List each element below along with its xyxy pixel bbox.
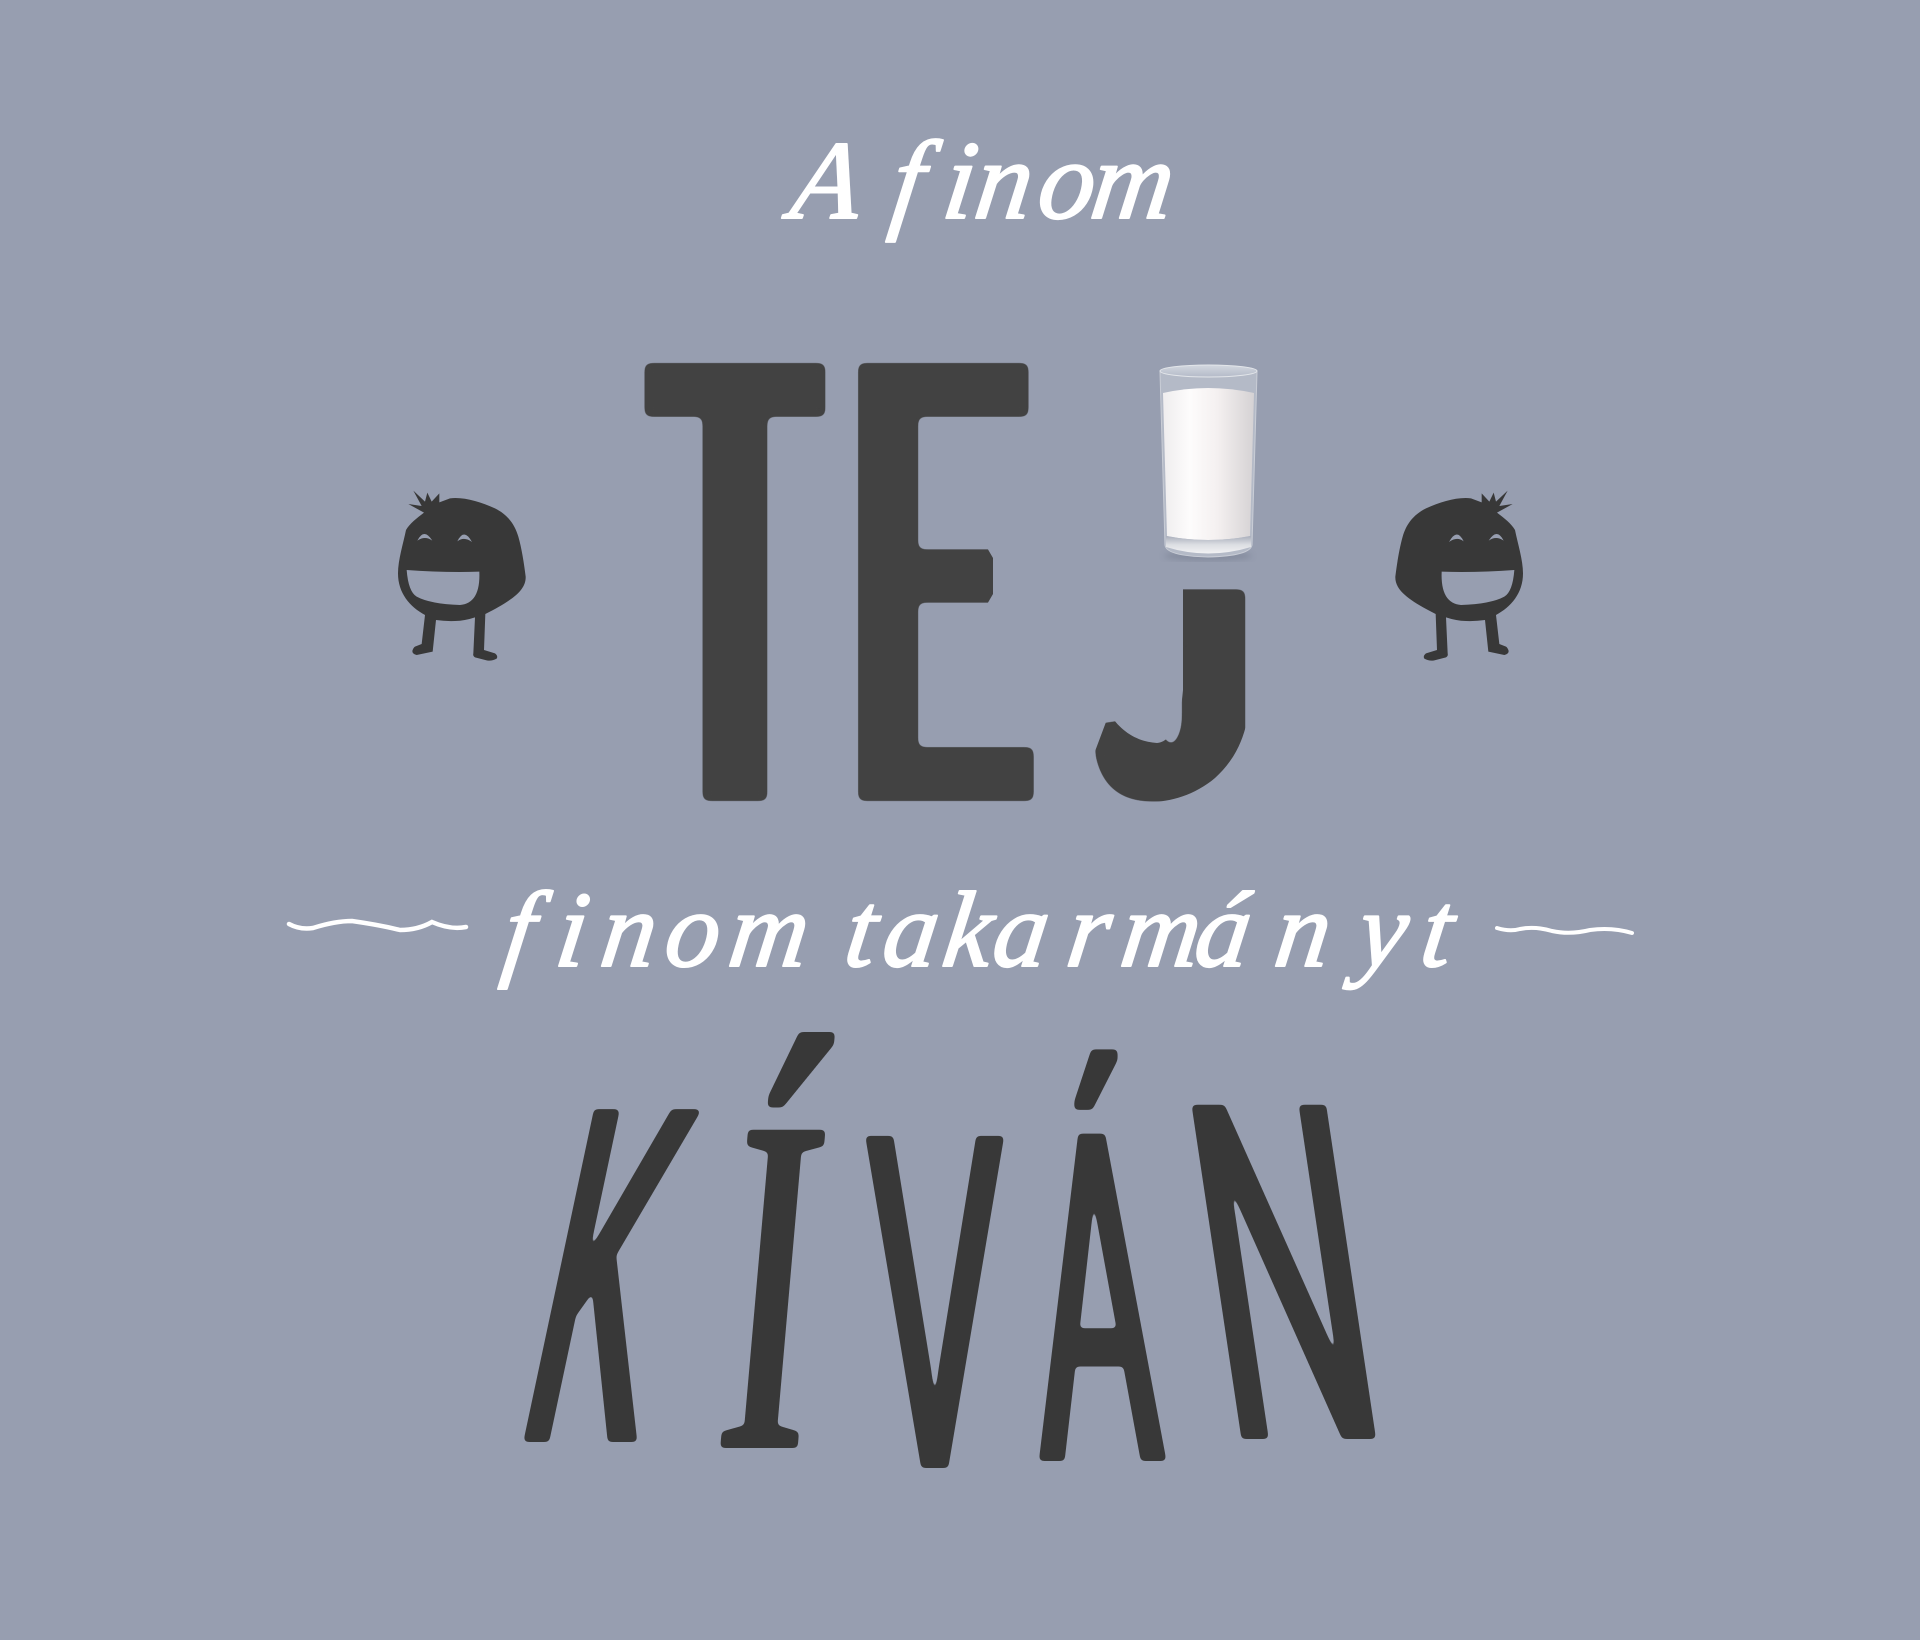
- flourish: left wave: [289, 921, 466, 930]
- character: left laughing blob: [398, 490, 526, 661]
- title: KÍVÁN: Í: [706, 1018, 840, 1550]
- title: KÍVÁN: [491, 1002, 1405, 1568]
- subheading with wave flourishes: finom takarmányt: finom takarmányt: [497, 870, 1464, 990]
- flourish: right wave: [1497, 928, 1632, 933]
- heading: A finom: A finom: [778, 120, 1180, 243]
- title: TEJ: [644, 230, 1246, 932]
- icon: glass of milk: [1160, 364, 1258, 562]
- title: TEJ: E: [855, 230, 1027, 932]
- title: TEJ: T: [660, 230, 810, 932]
- title: KÍVÁN: V: [869, 1035, 1000, 1568]
- title: KÍVÁN: Á: [1028, 1034, 1166, 1559]
- title: KÍVÁN: N: [1162, 1002, 1405, 1539]
- title: TEJ: J: [1110, 549, 1247, 840]
- title: KÍVÁN: K: [491, 1008, 727, 1542]
- character: right laughing blob: [1395, 490, 1523, 661]
